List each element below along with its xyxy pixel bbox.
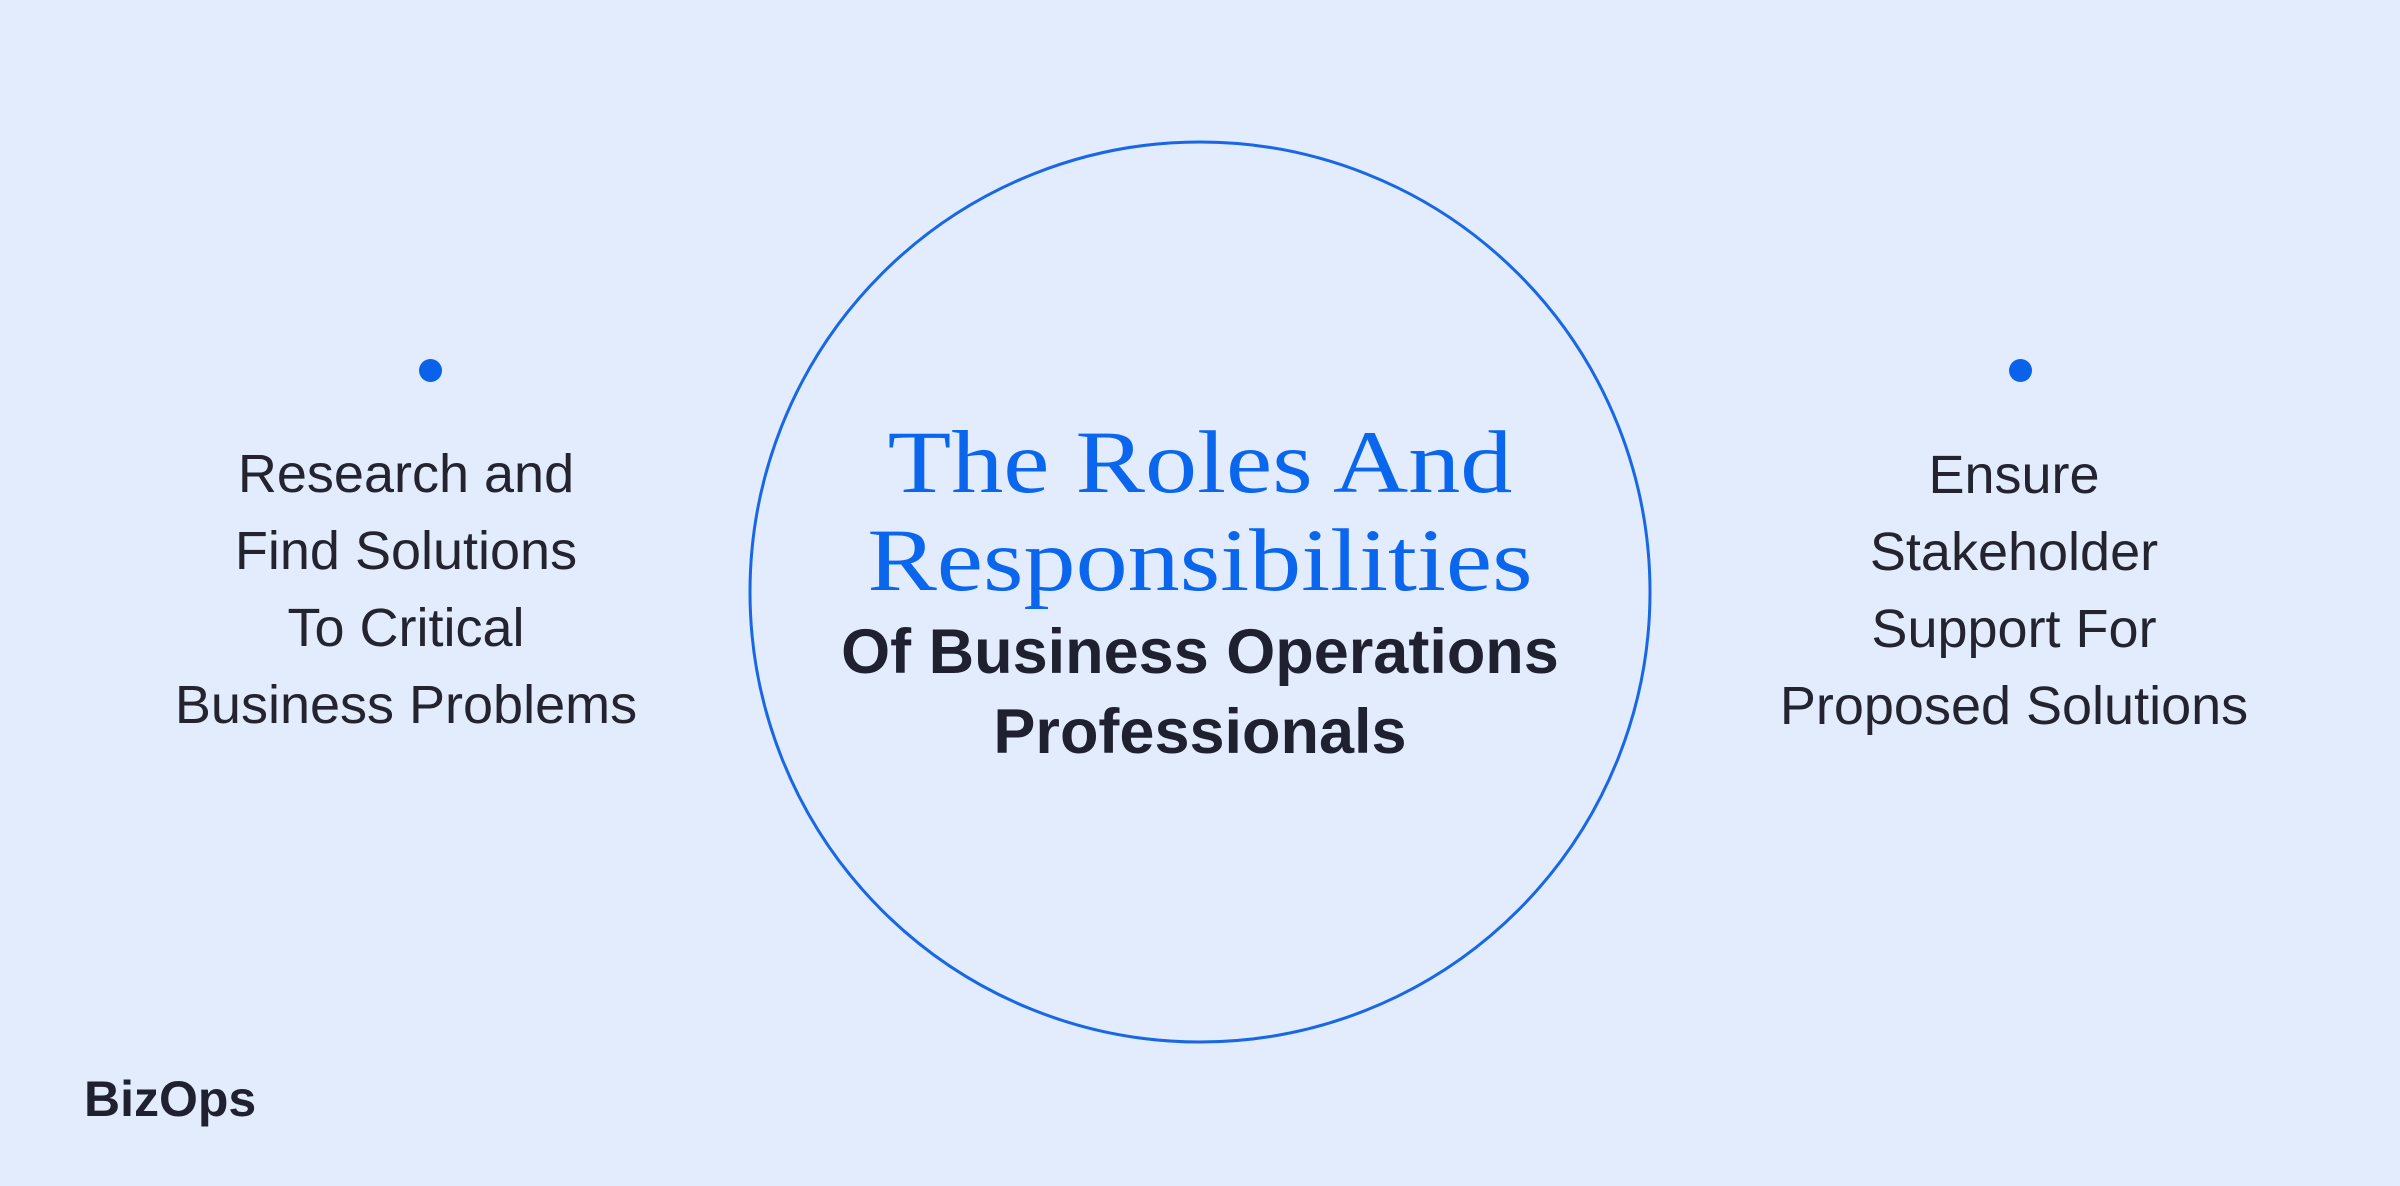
title: bold subtitle: Of Business Operations <box>841 617 1559 687</box>
right text block <box>1780 445 2248 736</box>
right text block: Support For <box>1871 599 2157 659</box>
left text block: Find Solutions <box>235 521 577 581</box>
left text block <box>175 444 637 735</box>
title: serif part: The Roles And <box>888 414 1512 512</box>
right text block: Proposed Solutions <box>1780 676 2248 736</box>
title: bold subtitle: Professionals <box>993 697 1407 767</box>
right text block: Ensure <box>1928 445 2100 505</box>
title: bold subtitle <box>841 617 1559 767</box>
logo: BizOps: BizOps <box>84 1071 256 1127</box>
right text block: Stakeholder <box>1870 522 2158 582</box>
left text block: Research and <box>238 444 574 504</box>
left text block: Business Problems <box>175 675 637 735</box>
title: serif part <box>867 414 1533 610</box>
left text block: To Critical <box>287 598 525 658</box>
title: serif part: Responsibilities <box>867 512 1533 610</box>
right dot <box>2009 359 2032 382</box>
left dot <box>419 359 442 382</box>
